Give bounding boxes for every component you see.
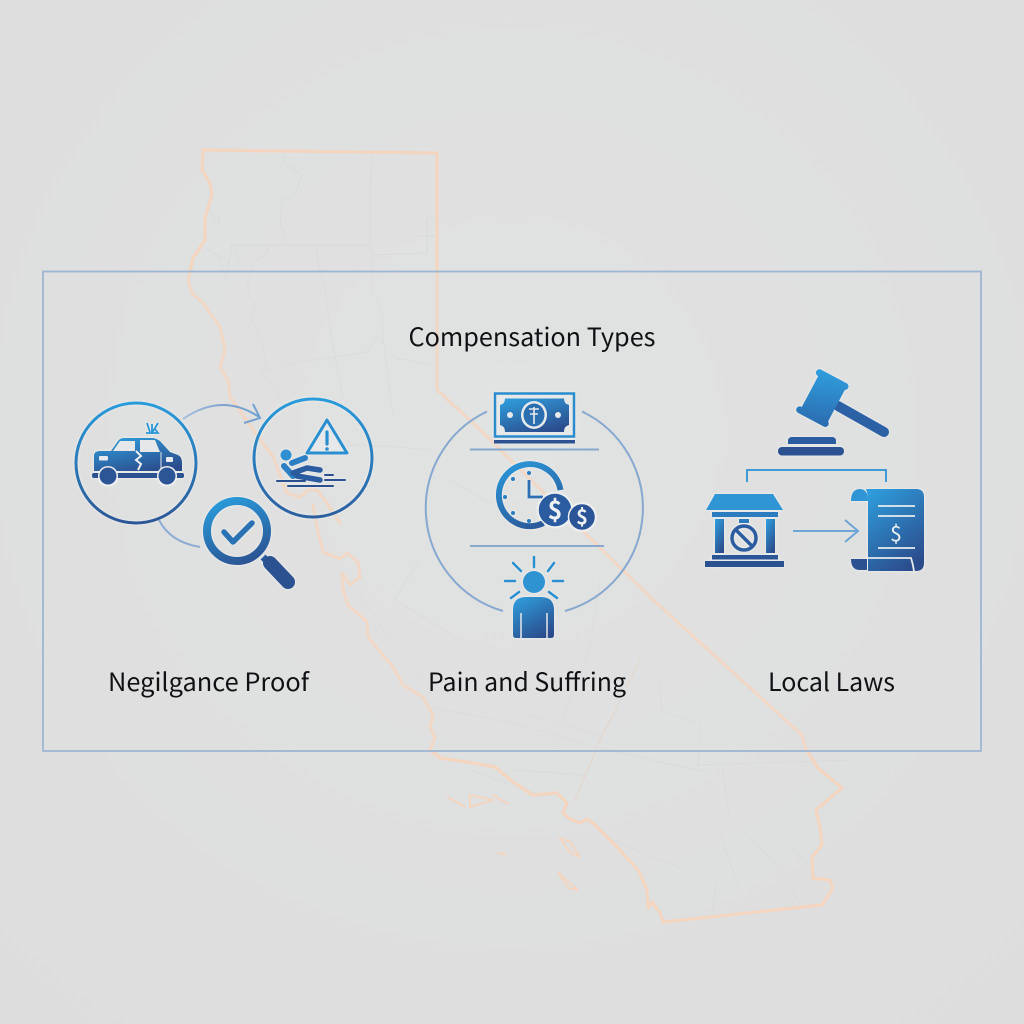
ring arcs and dividers: [426, 412, 643, 611]
main panel frame: [43, 272, 981, 751]
column: negligence proof: [76, 399, 372, 699]
icon: scroll with dollar: [851, 489, 924, 571]
column: local laws: [705, 368, 924, 699]
icon: slip and fall warning in circle: [254, 399, 372, 517]
icon: magnifier with check: [207, 501, 288, 582]
icon: scroll with dollar: $: [890, 518, 902, 548]
icon: clock with coins: $: [576, 501, 588, 530]
arrow: car to fall: [183, 404, 260, 423]
label: Negilgance Proof: Negilgance Proof: [108, 663, 310, 699]
icon: gavel: [778, 368, 884, 456]
background map: California: [188, 150, 850, 922]
icon: clock with coins: $: [548, 491, 562, 527]
icon: courthouse with prohibition sign: [705, 494, 784, 567]
icon: car crash in circle: [76, 403, 196, 523]
icon: banknote: [494, 394, 575, 444]
tree connector: [747, 470, 886, 482]
column: pain and suffering: [426, 394, 643, 699]
icon: clock with coins: [499, 464, 596, 530]
label: Pain and Suffring: Pain and Suffring: [428, 663, 626, 699]
label: Local Laws: Local Laws: [768, 663, 895, 699]
connector arc to magnifier: [159, 520, 200, 547]
icon: person in pain: [505, 557, 563, 638]
heading: Compensation Types: Compensation Types: [408, 318, 656, 354]
arrow: courthouse to document: [793, 520, 858, 542]
